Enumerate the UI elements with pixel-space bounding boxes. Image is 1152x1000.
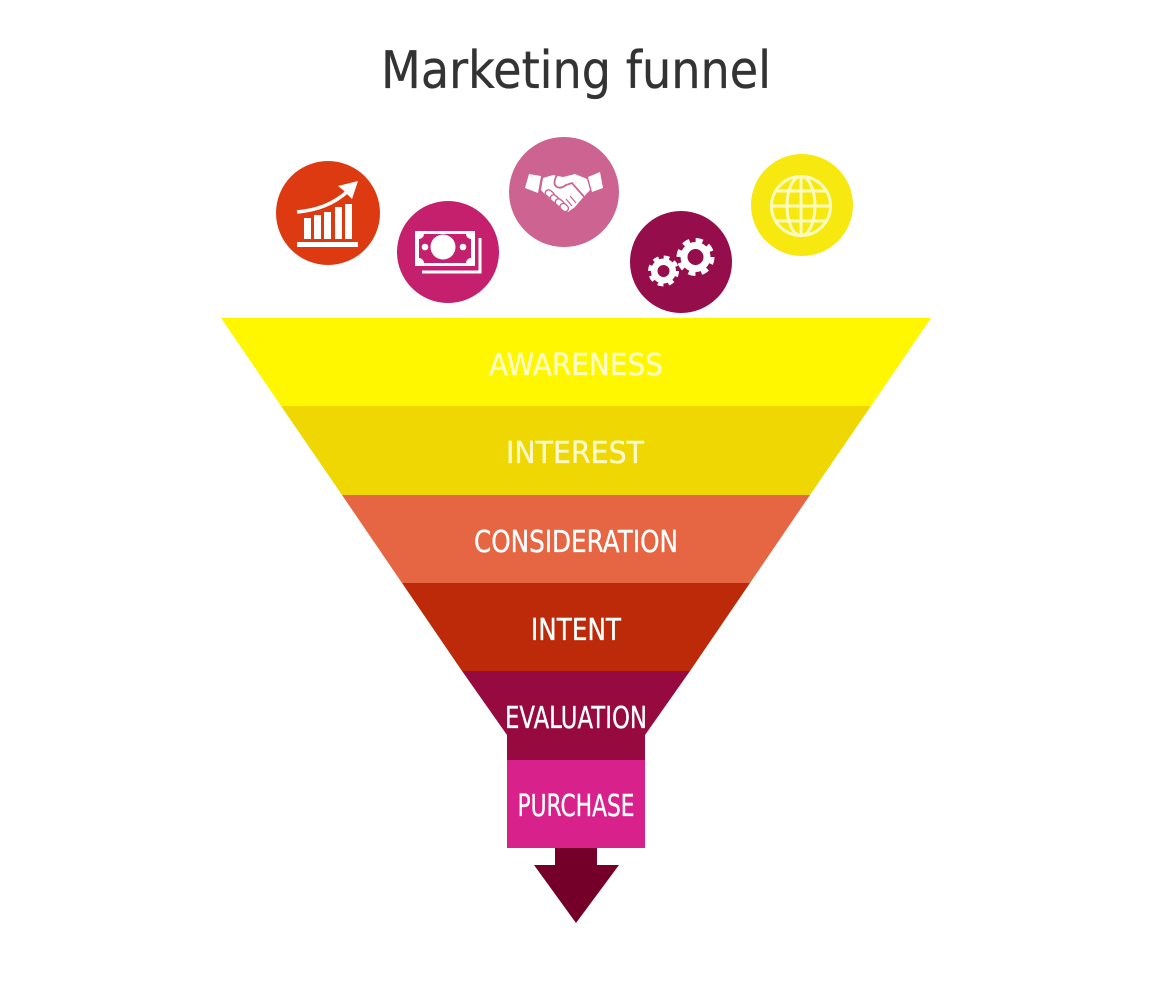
funnel stage: intent: INTENT <box>531 613 622 648</box>
funnel stage: intent <box>402 583 750 671</box>
icon: handshake <box>509 137 619 247</box>
funnel stage: interest: INTEREST <box>506 436 645 471</box>
icon: growth chart <box>276 161 380 265</box>
funnel stage: consideration <box>342 495 810 583</box>
icon: gears <box>630 211 732 313</box>
funnel stage: evaluation: EVALUATION <box>505 701 647 736</box>
funnel stage: interest <box>281 406 871 495</box>
funnel stage: awareness <box>221 318 931 406</box>
arrow: funnel output <box>534 848 619 923</box>
funnel stage: consideration: CONSIDERATION <box>474 525 678 560</box>
title: Marketing funnel <box>381 41 771 101</box>
funnel stage: evaluation <box>462 671 690 760</box>
funnel stage: purchase: PURCHASE <box>518 789 634 824</box>
icon: banknotes <box>397 201 499 303</box>
funnel <box>221 318 931 848</box>
icon: globe <box>751 154 853 256</box>
funnel stage: awareness: AWARENESS <box>489 348 663 383</box>
funnel stage: purchase <box>507 760 645 848</box>
